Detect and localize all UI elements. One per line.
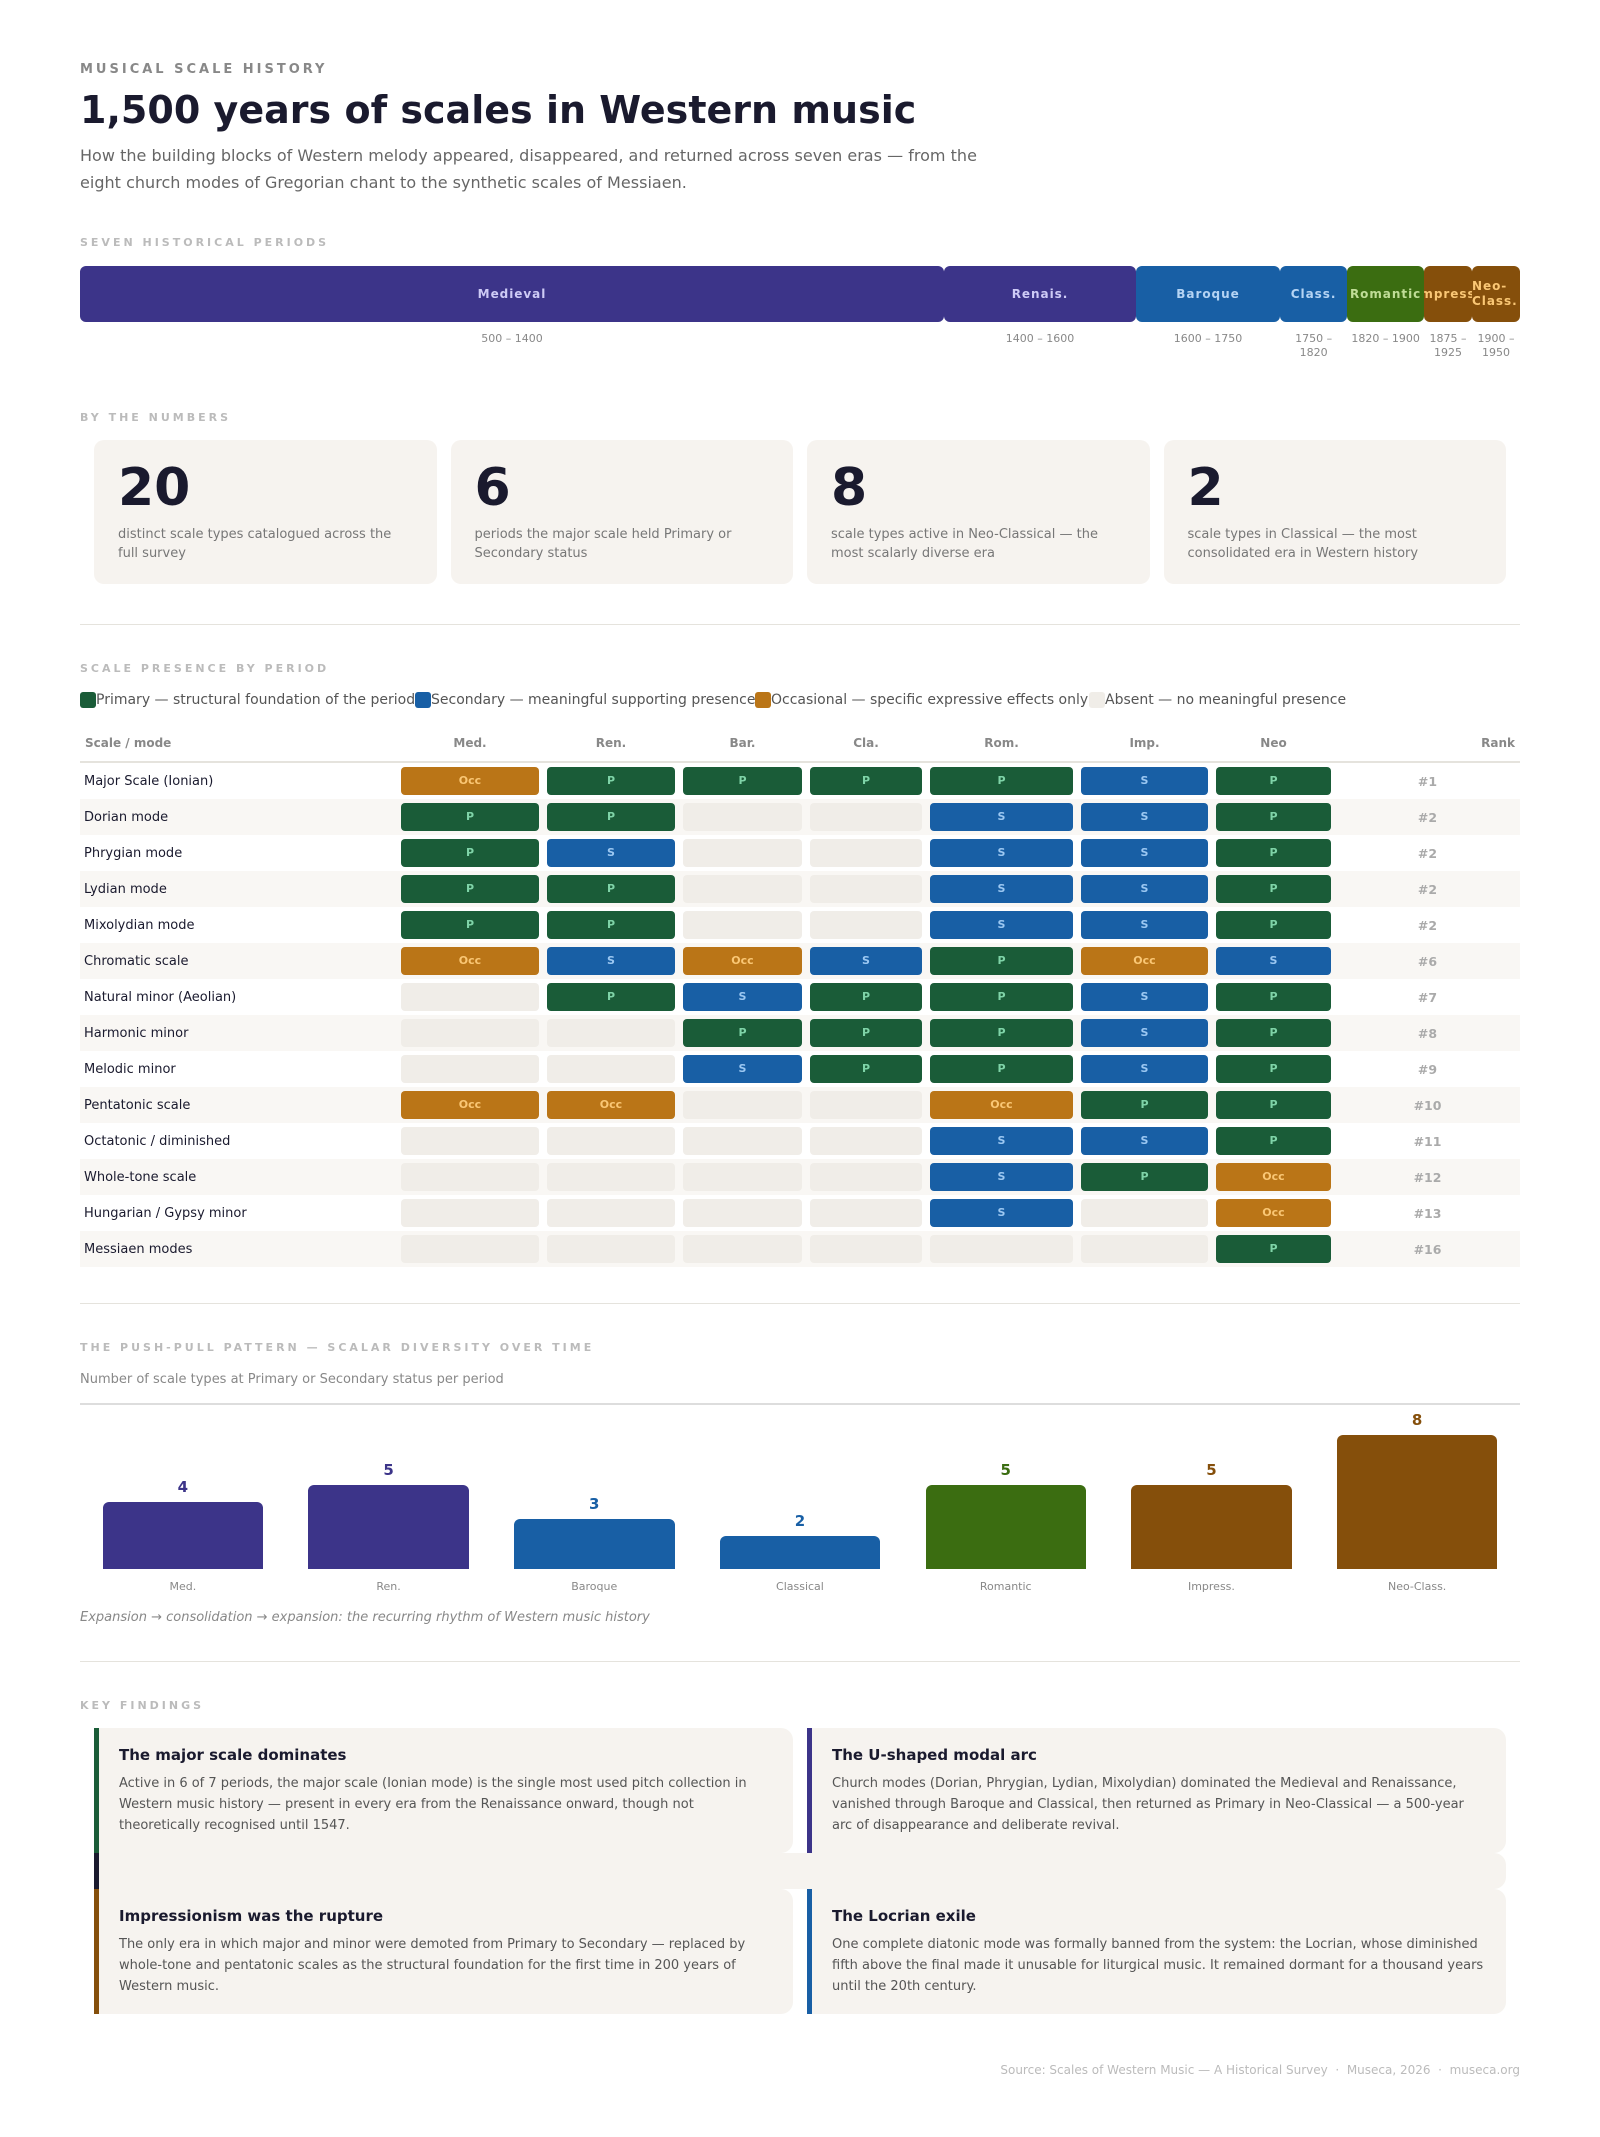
- stat card: 20: distinct scale types catalogued across the full survey: [118, 527, 391, 561]
- bar: Med: [103, 1502, 263, 1569]
- row: Pentatonic: #10: [1414, 1098, 1441, 1113]
- dates: Baroque: 1600 – 1750: [1174, 332, 1242, 345]
- row: Harmonic minor: S: [1141, 1026, 1148, 1039]
- table header: Rom: Rom.: [984, 736, 1019, 750]
- row: Pentatonic: Occ: [990, 1098, 1013, 1111]
- row: Hungarian: [84, 1199, 1441, 1227]
- legend swatch: absent: [1089, 692, 1105, 708]
- row: Messiaen: P: [1269, 1242, 1278, 1255]
- row: Natural minor: P: [607, 990, 615, 1003]
- row: Chromatic: Occ: [459, 954, 481, 967]
- finding spacer band: [94, 1853, 1506, 1889]
- section heading: numbers: BY THE NUMBERS: [80, 411, 231, 424]
- footer source: Source: Scales of Western Music — A Historical Survey · Museca, 2026 · museca.org: [1000, 2063, 1520, 2077]
- period: Romantic: Romantic: [1350, 286, 1421, 300]
- row: Dorian: #2: [1418, 810, 1437, 825]
- period: Medieval: [80, 266, 944, 322]
- row: Phrygian: P: [1269, 846, 1278, 859]
- table header: Neo: Neo: [1260, 736, 1287, 750]
- finding: major scale: Western music history — present in every era from the Renaissance onward, though not: [119, 1797, 694, 1812]
- dates: Classical: 1750 – 1820: [1295, 332, 1332, 359]
- label: Baroque: Baroque: [571, 1580, 617, 1593]
- legend swatch: secondary: [415, 692, 431, 708]
- stat card: 2: 2: [1188, 458, 1224, 518]
- label: Ren: Ren.: [376, 1580, 401, 1593]
- period: Baroque: Baroque: [1176, 286, 1240, 300]
- title: 1,500 years of scales in Western music: [80, 88, 916, 132]
- row: Mixolydian: Mixolydian mode: [84, 918, 194, 933]
- label: Impressionism: Impress.: [1188, 1580, 1235, 1593]
- bar: Ren: [308, 1485, 469, 1569]
- period: Neo-Classical: Neo-Class.: [1472, 279, 1518, 308]
- label: Romantic: Romantic: [980, 1580, 1032, 1593]
- row: Dorian: P: [1269, 810, 1278, 823]
- row: Major Scale: P: [607, 774, 615, 787]
- finding: impressionism: [94, 1889, 793, 2014]
- row: Lydian: [80, 871, 1520, 907]
- finding: major scale: theoretically recognised until 1547.: [119, 1818, 350, 1833]
- row: Major Scale: S: [1141, 774, 1148, 787]
- row: Mixolydian: S: [1141, 918, 1148, 931]
- bar: Baroque: [514, 1519, 674, 1569]
- row: Mixolydian: P: [607, 918, 615, 931]
- row: Pentatonic: P: [1140, 1098, 1149, 1111]
- table header: scale: Scale / mode: [85, 736, 171, 750]
- stat card: 8: [807, 440, 1150, 584]
- table header: Med: Med.: [453, 736, 487, 750]
- row: Melodic minor: Melodic minor: [84, 1062, 176, 1077]
- period: Neo-Classical: [1472, 266, 1520, 322]
- row: Mixolydian: #2: [1418, 918, 1437, 933]
- row: Major Scale: [84, 767, 1437, 795]
- row: Major Scale: Occ: [459, 774, 481, 787]
- row: Dorian: P: [466, 810, 474, 823]
- finding: locrian: fifth above the final made it unusable for liturgical music. It remained dormant for a thousand years: [832, 1958, 1483, 1973]
- row: Major Scale: #1: [1418, 774, 1437, 789]
- row: Chromatic: [80, 943, 1520, 979]
- row: Dorian: P: [607, 810, 615, 823]
- chart subtitle: Number of scale types at Primary or Secondary status per period: [80, 1372, 504, 1387]
- table header: Cla: Cla.: [853, 736, 879, 750]
- row: Hungarian: Hungarian / Gypsy minor: [84, 1206, 247, 1221]
- row: Major Scale: P: [1269, 774, 1278, 787]
- finding: impressionism: Western music.: [119, 1979, 219, 1994]
- row: Dorian: S: [1141, 810, 1148, 823]
- row: Dorian: [80, 799, 1520, 835]
- value: Ren: 5: [383, 1461, 394, 1479]
- finding: locrian: The Locrian exile: [832, 1907, 976, 1925]
- row: Octatonic: S: [1141, 1134, 1148, 1147]
- row: Messiaen: Messiaen modes: [84, 1242, 192, 1257]
- subtitle: [80, 146, 977, 192]
- finding: modal arc: The U-shaped modal arc: [832, 1746, 1037, 1764]
- row: Harmonic minor: #8: [1418, 1026, 1437, 1041]
- row: Lydian: P: [466, 882, 474, 895]
- value: Baroque: 3: [589, 1495, 599, 1513]
- legend swatch: primary: [80, 692, 96, 708]
- row: Whole-tone: Occ: [1262, 1170, 1285, 1183]
- stat card: 2: scale types in Classical — the most consolidated era in Western history: [1188, 527, 1418, 561]
- row: Hungarian: #13: [1414, 1206, 1441, 1221]
- row: Dorian: Dorian mode: [84, 810, 168, 825]
- row: Melodic minor: S: [1141, 1062, 1148, 1075]
- row: Lydian: S: [1141, 882, 1148, 895]
- row: Whole-tone: P: [1140, 1170, 1149, 1183]
- bar: Romantic: [926, 1485, 1086, 1569]
- bar: Classical: [720, 1536, 880, 1569]
- section heading: findings: KEY FINDINGS: [80, 1699, 204, 1712]
- row: Mixolydian: S: [998, 918, 1005, 931]
- period: Classical: Class.: [1291, 286, 1336, 300]
- row: Major Scale: P: [997, 774, 1006, 787]
- period: Renaissance: [944, 266, 1136, 322]
- row: Messiaen: [80, 1231, 1520, 1267]
- finding: major scale: Active in 6 of 7 periods, the major scale (Ionian mode) is the single most used pitch collection in: [119, 1776, 747, 1791]
- label: Classical: Classical: [776, 1580, 824, 1593]
- row: Phrygian: P: [466, 846, 474, 859]
- row: Mixolydian: P: [466, 918, 474, 931]
- row: Whole-tone: [80, 1159, 1520, 1195]
- bar: Impressionism: [1131, 1485, 1292, 1569]
- table header: Rank: Rank: [1481, 736, 1515, 750]
- period: Romantic: [1347, 266, 1424, 322]
- dates: Neo-Classical: 1900 – 1950: [1478, 332, 1514, 359]
- row: Chromatic: S: [607, 954, 615, 967]
- table header: Imp: Imp.: [1129, 736, 1160, 750]
- row: Pentatonic: [80, 1087, 1520, 1123]
- row: Melodic minor: P: [997, 1062, 1006, 1075]
- row: Mixolydian: P: [1269, 918, 1278, 931]
- row: Melodic minor: #9: [1418, 1062, 1437, 1077]
- finding: major scale: [94, 1728, 793, 1853]
- row: Chromatic: S: [1270, 954, 1277, 967]
- row: Harmonic minor: P: [738, 1026, 747, 1039]
- row: Dorian: S: [998, 810, 1005, 823]
- row: Major Scale: Major Scale (Ionian): [84, 774, 213, 789]
- row: Natural minor: P: [1269, 990, 1278, 1003]
- finding: modal arc: arc of disappearance and deliberate revival.: [832, 1818, 1120, 1833]
- period: Renaissance: Renais.: [1012, 286, 1068, 300]
- stat card: 20: [94, 440, 436, 584]
- finding: modal arc: Church modes (Dorian, Phrygian, Lydian, Mixolydian) dominated the Medieval and Renaissance,: [832, 1776, 1457, 1791]
- legend text: absent: Absent — no meaningful presence: [1105, 692, 1346, 708]
- row: Harmonic minor: Harmonic minor: [84, 1026, 188, 1041]
- row: Melodic minor: P: [1269, 1062, 1278, 1075]
- row: Phrygian: S: [607, 846, 615, 859]
- finding: impressionism: whole-tone and pentatonic scales as the structural foundation for the first time in 200 years of: [119, 1958, 736, 1973]
- row: Octatonic: Octatonic / diminished: [84, 1134, 230, 1149]
- row: Chromatic: Occ: [731, 954, 754, 967]
- value: Romantic: 5: [1001, 1461, 1011, 1479]
- row: Natural minor: P: [997, 990, 1006, 1003]
- row: Whole-tone: #12: [1414, 1170, 1441, 1185]
- row: Hungarian: S: [998, 1206, 1005, 1219]
- row: Lydian: #2: [1418, 882, 1437, 897]
- stat card: 8: 8: [831, 458, 867, 518]
- row: Octatonic: P: [1269, 1134, 1278, 1147]
- value: Classical: 2: [795, 1512, 805, 1530]
- row: Pentatonic: P: [1269, 1098, 1278, 1111]
- row: Natural minor: S: [1141, 990, 1148, 1003]
- dates: Impressionism: 1875 – 1925: [1430, 332, 1466, 359]
- row: Pentatonic: Occ: [459, 1098, 481, 1111]
- row: Whole-tone: Whole-tone scale: [84, 1170, 196, 1185]
- finding: major scale: The major scale dominates: [119, 1746, 346, 1764]
- stat card: 20: 20: [118, 458, 190, 518]
- row: Phrygian: [84, 839, 1437, 867]
- stat card: 6: 6: [474, 458, 511, 518]
- label: Med: Med.: [169, 1580, 196, 1593]
- stat card: 8: scale types active in Neo-Classical — the most scalarly diverse era: [831, 527, 1098, 561]
- row: Chromatic: S: [862, 954, 870, 967]
- row: Melodic minor: P: [862, 1062, 870, 1075]
- row: Harmonic minor: [80, 1015, 1520, 1051]
- row: Lydian: P: [607, 882, 615, 895]
- row: Natural minor: Natural minor (Aeolian): [84, 990, 236, 1005]
- row: Natural minor: #7: [1418, 990, 1437, 1005]
- finding: modal arc: [807, 1728, 1506, 1853]
- row: Chromatic: P: [997, 954, 1006, 967]
- row: Harmonic minor: P: [1269, 1026, 1278, 1039]
- section heading: presence: SCALE PRESENCE BY PERIOD: [80, 662, 329, 675]
- row: Harmonic minor: P: [862, 1026, 870, 1039]
- row: Major Scale: P: [738, 774, 747, 787]
- dates: Renaissance: 1400 – 1600: [1006, 332, 1074, 345]
- row: Hungarian: Occ: [1262, 1206, 1285, 1219]
- legend swatch: occasional: [755, 692, 771, 708]
- row: Octatonic: S: [998, 1134, 1005, 1147]
- value: Neo-Classical: 8: [1412, 1411, 1422, 1429]
- row: Major Scale: P: [862, 774, 870, 787]
- legend text: primary: Primary — structural foundation of the period: [96, 692, 415, 708]
- stat card: 6: [450, 440, 793, 584]
- subtitle: How the building blocks of Western melody appeared, disappeared, and returned across seven eras — from the: [80, 146, 977, 165]
- finding: impressionism: Impressionism was the rupture: [119, 1907, 383, 1925]
- row: Phrygian: S: [998, 846, 1005, 859]
- row: Natural minor: S: [739, 990, 746, 1003]
- section heading: periods: SEVEN HISTORICAL PERIODS: [80, 236, 329, 249]
- finding: locrian: [807, 1889, 1506, 2014]
- stat card: 6: periods the major scale held Primary or Secondary status: [474, 527, 732, 561]
- row: Chromatic: Occ: [1133, 954, 1156, 967]
- row: Pentatonic: Occ: [600, 1098, 622, 1111]
- chart note: Expansion → consolidation → expansion: the recurring rhythm of Western music history: [80, 1610, 650, 1625]
- row: Melodic minor: [84, 1055, 1437, 1083]
- row: Lydian: P: [1269, 882, 1278, 895]
- row: Messiaen: #16: [1414, 1242, 1441, 1257]
- period: Classical: [1280, 266, 1347, 322]
- period: Impressionism: [1424, 266, 1472, 322]
- eyebrow: MUSICAL SCALE HISTORY: [80, 62, 327, 77]
- row: Phrygian: #2: [1418, 846, 1437, 861]
- table header: Ren: Ren.: [596, 736, 626, 750]
- bar: Neo-Classical: [1337, 1435, 1497, 1569]
- row: Natural minor: P: [862, 990, 870, 1003]
- subtitle: eight church modes of Gregorian chant to the synthetic scales of Messiaen.: [80, 173, 687, 192]
- legend text: occasional: Occasional — specific expressive effects only: [771, 692, 1088, 708]
- row: Mixolydian: [84, 911, 1437, 939]
- label: Neo-Classical: Neo-Class.: [1388, 1580, 1446, 1593]
- row: Chromatic: Chromatic scale: [84, 954, 188, 969]
- period: Baroque: [1136, 266, 1280, 322]
- value: Med: 4: [178, 1478, 188, 1496]
- row: Octatonic: [84, 1127, 1441, 1155]
- row: Octatonic: #11: [1414, 1134, 1441, 1149]
- finding: impressionism: The only era in which major and minor were demoted from Primary to Secondary — replaced by: [119, 1937, 745, 1952]
- finding: locrian: until the 20th century.: [832, 1979, 976, 1994]
- period: Medieval: Medieval: [478, 286, 546, 300]
- row: Whole-tone: S: [998, 1170, 1005, 1183]
- row: Pentatonic: Pentatonic scale: [84, 1098, 190, 1113]
- value: Impressionism: 5: [1206, 1461, 1217, 1479]
- finding: locrian: One complete diatonic mode was formally banned from the system: the Locrian, whose diminished: [832, 1937, 1478, 1952]
- dates: Medieval: 500 – 1400: [481, 332, 543, 345]
- row: Lydian: S: [998, 882, 1005, 895]
- section heading: chart: THE PUSH-PULL PATTERN — SCALAR DIVERSITY OVER TIME: [80, 1341, 594, 1354]
- legend text: secondary: Secondary — meaningful supporting presence: [431, 692, 755, 708]
- row: Harmonic minor: P: [997, 1026, 1006, 1039]
- row: Melodic minor: S: [739, 1062, 746, 1075]
- table header: Bar: Bar.: [729, 736, 756, 750]
- row: Phrygian: S: [1141, 846, 1148, 859]
- row: Natural minor: [84, 983, 1437, 1011]
- stat card: 2: [1164, 440, 1506, 584]
- dates: Romantic: 1820 – 1900: [1351, 332, 1420, 345]
- row: Phrygian: Phrygian mode: [84, 846, 182, 861]
- row: Lydian: Lydian mode: [84, 882, 167, 897]
- finding: modal arc: vanished through Baroque and Classical, then returned as Primary in Neo-Classical — a 500-year: [832, 1797, 1464, 1812]
- row: Chromatic: #6: [1418, 954, 1437, 969]
